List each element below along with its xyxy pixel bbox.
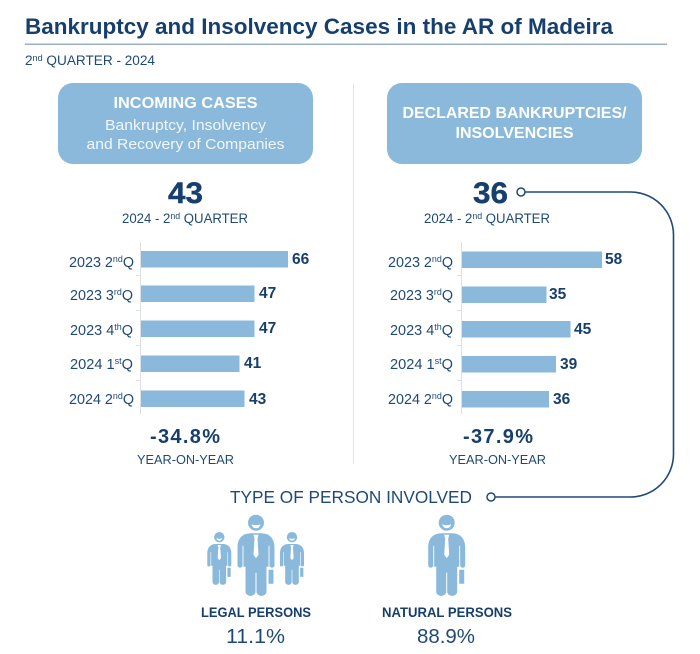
panel: declared bankruptcies header <box>387 83 642 164</box>
bar chart: incoming cases: Q <box>122 323 133 339</box>
bar chart: declared bankruptcies: 36 <box>553 391 571 408</box>
bar chart: declared bankruptcies: 2023 4 <box>390 323 434 339</box>
bar chart: declared bankruptcies: 58 <box>605 251 623 268</box>
panel: incoming cases header: INCOMING CASES <box>114 95 258 112</box>
bar chart: declared bankruptcies: nd <box>432 391 442 401</box>
declared cases headline value: 2024 - 2 <box>424 211 474 226</box>
bar chart: incoming cases: Q <box>122 288 133 304</box>
arrow: connector from 36 to type of person <box>487 188 674 501</box>
bar chart: declared bankruptcies: Q <box>442 255 453 271</box>
year-on-year change: declared: YEAR-ON-YEAR <box>449 452 546 467</box>
legal persons label and value <box>201 605 311 648</box>
bar chart: incoming cases: 2024 2 <box>69 392 113 408</box>
natural persons label and value: NATURAL PERSONS <box>382 605 512 620</box>
bar chart: incoming cases: nd <box>113 391 123 401</box>
bar chart: incoming cases: nd <box>113 254 123 264</box>
bar chart: declared bankruptcies: Q <box>442 323 453 339</box>
bar chart: declared bankruptcies <box>388 242 623 414</box>
bar chart: declared bankruptcies: 2023 2 <box>388 255 432 271</box>
subtitle: nd <box>33 53 43 63</box>
incoming cases headline value: 2024 - 2 <box>122 211 172 226</box>
declared cases headline value: QUARTER <box>482 211 550 226</box>
bar chart: declared bankruptcies: Q <box>442 288 453 304</box>
declared cases headline value <box>424 177 550 226</box>
bar chart: declared bankruptcies: 2024 2 <box>388 392 432 408</box>
bar chart: declared bankruptcies: st <box>435 356 442 366</box>
bar chart: declared bankruptcies: 2023 3 <box>390 288 434 304</box>
subtitle: 2 <box>25 53 33 68</box>
incoming cases headline value: nd <box>170 211 180 221</box>
panel: declared bankruptcies header: DECLARED BANKRUPTCIES/ <box>402 105 627 122</box>
bar chart: declared bankruptcies: 45 <box>574 321 592 338</box>
icon: natural person <box>428 515 465 596</box>
declared cases headline value: nd <box>472 211 482 221</box>
bar chart: incoming cases <box>69 242 310 414</box>
bar chart: declared bankruptcies: 39 <box>560 356 578 373</box>
subtitle: QUARTER - 2024 <box>43 53 155 68</box>
legal persons label and value: 11.1% <box>226 626 285 648</box>
bar chart: declared bankruptcies: th <box>434 322 442 332</box>
bar chart: incoming cases: 41 <box>244 355 262 372</box>
bar chart: declared bankruptcies: 35 <box>549 286 567 303</box>
bar chart: incoming cases: 2024 1 <box>70 357 114 373</box>
bar chart: incoming cases: 2023 2 <box>69 255 113 271</box>
bar chart: incoming cases: 47 <box>259 285 276 302</box>
natural persons label and value: 88.9% <box>417 626 475 648</box>
bar chart: incoming cases: Q <box>123 392 134 408</box>
incoming cases headline value: 43 <box>168 177 203 210</box>
bar chart: declared bankruptcies: nd <box>432 254 442 264</box>
natural persons label and value <box>382 605 512 648</box>
bar chart: incoming cases: th <box>114 322 122 332</box>
panel: declared bankruptcies header: INSOLVENCIES <box>456 125 574 142</box>
year-on-year change: incoming: YEAR-ON-YEAR <box>137 452 234 467</box>
bar chart: incoming cases: 47 <box>259 320 276 337</box>
bar chart: declared bankruptcies: rd <box>434 287 442 297</box>
bar chart: incoming cases: 66 <box>292 251 310 268</box>
incoming cases headline value <box>122 177 248 226</box>
bar chart: declared bankruptcies: Q <box>442 392 453 408</box>
title: Bankruptcy and Insolvency Cases in the AR of Madeira <box>25 14 614 39</box>
bar chart: incoming cases: rd <box>114 287 122 297</box>
bar chart: incoming cases: 43 <box>249 391 267 408</box>
bar chart: declared bankruptcies: Q <box>442 357 453 373</box>
bar chart: incoming cases: st <box>115 356 122 366</box>
year-on-year change: incoming <box>137 426 234 467</box>
panel: incoming cases header: Bankruptcy, Insolvency <box>105 118 267 134</box>
year-on-year change: declared: -37.9% <box>463 426 533 448</box>
year-on-year change: incoming: -34.8% <box>150 426 220 448</box>
legal persons label and value: LEGAL PERSONS <box>201 605 311 620</box>
bar chart: declared bankruptcies: 2024 1 <box>390 357 434 373</box>
bar chart: incoming cases: 2023 4 <box>70 323 114 339</box>
incoming cases headline value: QUARTER <box>180 211 248 226</box>
bar chart: incoming cases: Q <box>123 255 134 271</box>
year-on-year change: declared <box>449 426 546 467</box>
declared cases headline value: 36 <box>473 177 508 210</box>
icon: legal persons group <box>207 515 304 596</box>
heading: type of person involved: TYPE OF PERSON INVOLVED <box>230 487 472 507</box>
panel: incoming cases header <box>58 83 313 164</box>
panel: incoming cases header: and Recovery of Companies <box>86 137 284 153</box>
bar chart: incoming cases: 2023 3 <box>70 288 114 304</box>
bar chart: incoming cases: Q <box>122 357 133 373</box>
